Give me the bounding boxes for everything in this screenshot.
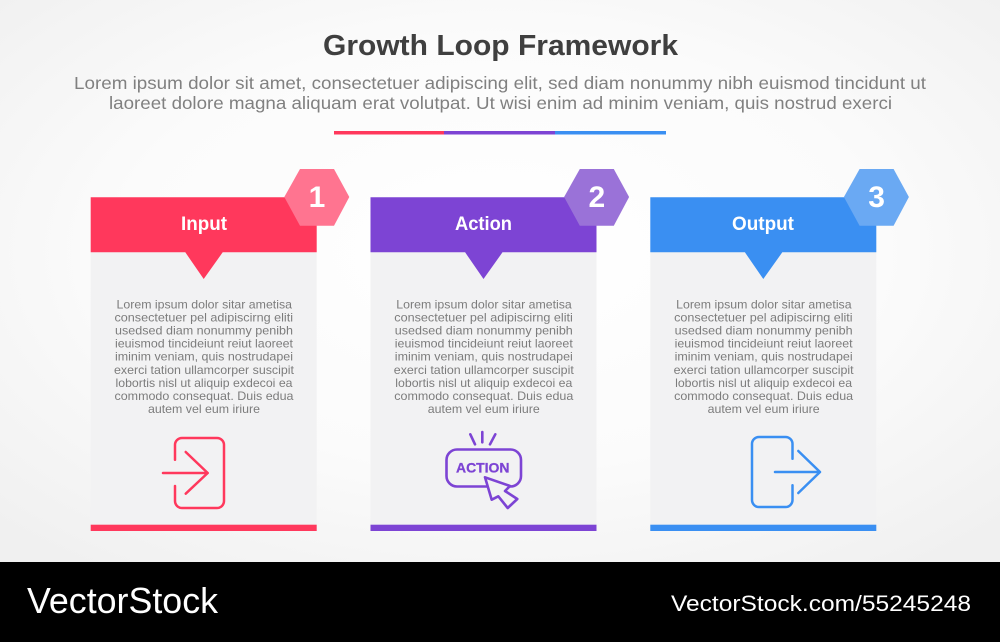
body text: commodo consequat. Duis edua [114, 389, 294, 403]
heading: Output [732, 214, 795, 235]
icon: sign in [163, 438, 224, 508]
body text [674, 297, 854, 416]
card background [650, 252, 876, 525]
body text: autem vel eum iriure [708, 402, 820, 416]
body text: iminim veniam, quis nostrudapei [675, 350, 853, 364]
footer image id: VectorStock.com/55245248 [671, 591, 971, 616]
number badge: 1 [309, 181, 325, 214]
body text: Lorem ipsum dolor sitar ametisa [676, 297, 852, 311]
footer band [0, 562, 1000, 642]
header banner with pointer [370, 197, 596, 279]
icon: action button with cursor [446, 432, 521, 508]
subtitle: laoreet dolore magna aliquam erat volutpat. Ut wisi enim ad minim veniam, quis nostrud exerci [109, 93, 892, 113]
body text: consectetuer pel adipiscirng eliti [114, 310, 293, 324]
body text: ieuismod tincideiunt reiut laoreet [675, 337, 853, 351]
body text: consectetuer pel adipiscirng eliti [674, 310, 853, 324]
number badge [284, 169, 349, 226]
body text: commodo consequat. Duis edua [394, 389, 574, 403]
bottom accent bar [650, 525, 876, 531]
number badge: 3 [868, 181, 885, 214]
body text: usedsed diam nonummy penibh [115, 324, 293, 338]
body text: commodo consequat. Duis edua [674, 389, 853, 403]
panel: output [650, 169, 909, 531]
footer logo text: VectorStock [27, 580, 219, 621]
body text: lobortis nisl ut aliquip exdecoi ea [116, 376, 293, 390]
icon: action button with cursor: ACTION [456, 460, 510, 476]
body text: lobortis nisl ut aliquip exdecoi ea [395, 376, 573, 390]
body text: iminim veniam, quis nostrudapei [115, 350, 293, 364]
card background [91, 252, 317, 525]
subtitle [74, 73, 926, 113]
panel: action [370, 169, 629, 531]
tricolor divider [334, 131, 666, 134]
heading: Input [181, 214, 228, 235]
title: Growth Loop Framework [323, 30, 679, 62]
body text: consectetuer pel adipiscirng eliti [394, 310, 573, 324]
body text [394, 297, 574, 416]
subtitle: Lorem ipsum dolor sit amet, consectetuer adipiscing elit, sed diam nonummy nibh euismod tincidunt ut [74, 73, 926, 93]
body text: exerci tation ullamcorper suscipit [394, 363, 574, 377]
body text: autem vel eum iriure [148, 402, 260, 416]
body text: exerci tation ullamcorper suscipit [674, 363, 854, 377]
body text [114, 297, 295, 416]
number badge [844, 169, 909, 226]
body text: lobortis nisl ut aliquip exdecoi ea [675, 376, 852, 390]
body text: iminim veniam, quis nostrudapei [395, 350, 573, 364]
number badge [564, 169, 629, 226]
card background [370, 252, 596, 525]
heading: Action [455, 214, 512, 235]
body text: Lorem ipsum dolor sitar ametisa [116, 297, 292, 311]
body text: ieuismod tincideiunt reiut laoreet [395, 337, 573, 351]
panel: input [91, 169, 349, 531]
bottom accent bar [91, 525, 317, 531]
bottom accent bar [370, 525, 596, 531]
body text: Lorem ipsum dolor sitar ametisa [396, 297, 572, 311]
body text: autem vel eum iriure [428, 402, 540, 416]
icon: sign out [752, 437, 820, 507]
header banner with pointer [650, 197, 876, 279]
body text: exerci tation ullamcorper suscipit [114, 363, 295, 377]
body text: usedsed diam nonummy penibh [675, 324, 853, 338]
number badge: 2 [588, 181, 605, 214]
header banner with pointer [91, 197, 317, 279]
body text: ieuismod tincideiunt reiut laoreet [115, 337, 294, 351]
body text: usedsed diam nonummy penibh [395, 324, 573, 338]
